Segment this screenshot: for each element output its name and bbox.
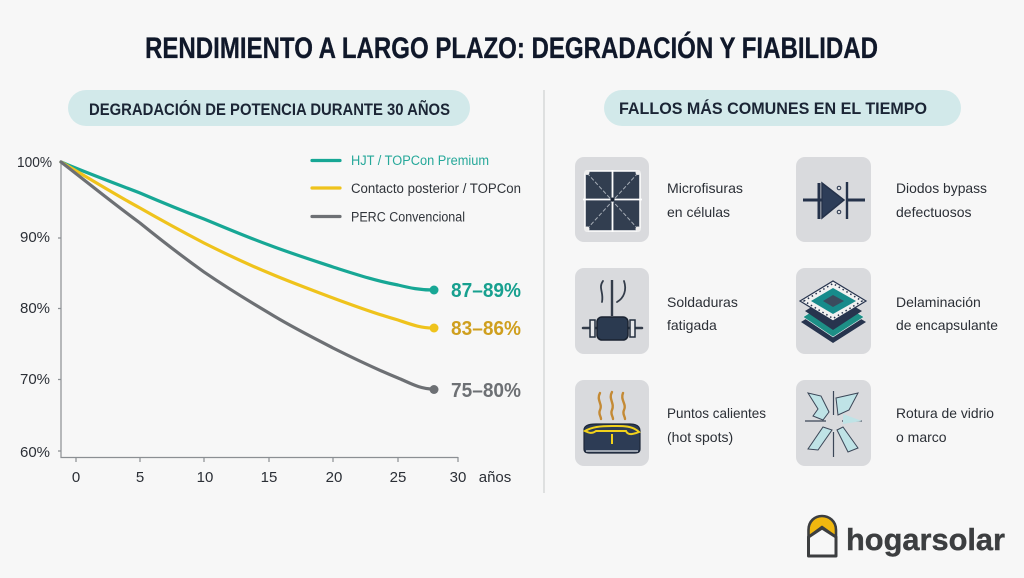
failure: delaminación bbox=[796, 268, 998, 354]
x axis labels: 20 bbox=[326, 469, 342, 486]
icon: delaminated layers bbox=[796, 268, 871, 354]
x axis labels: 5 bbox=[136, 469, 144, 486]
label: Delaminación bbox=[896, 294, 981, 310]
right section heading bbox=[604, 90, 961, 126]
icon: hot spot bbox=[575, 380, 649, 466]
label: Puntos calientes bbox=[667, 405, 766, 421]
icon: fatigued solder joint bbox=[575, 268, 649, 354]
x axis labels: 10 bbox=[197, 469, 213, 486]
y axis labels: 100% bbox=[17, 154, 52, 171]
failure: rotura de vidrio bbox=[796, 380, 994, 466]
x axis labels: 30 bbox=[450, 469, 466, 486]
chart legend: PERC Convencional bbox=[351, 210, 465, 224]
end value: 83–86%: 83–86% bbox=[451, 318, 521, 340]
y axis labels: 70% bbox=[20, 371, 50, 388]
label: fatigada bbox=[667, 317, 717, 333]
left section heading: DEGRADACIÓN DE POTENCIA DURANTE 30 AÑOS bbox=[89, 99, 450, 119]
y axis labels bbox=[17, 154, 52, 461]
label: Rotura de vidrio bbox=[896, 405, 994, 421]
failure: diodos bypass bbox=[796, 157, 987, 242]
icon: cracked solar cell bbox=[575, 157, 649, 242]
curve: PERC Convencional bbox=[61, 162, 438, 394]
y axis labels: 90% bbox=[20, 229, 50, 246]
logo: hogarsolar bbox=[808, 516, 1005, 557]
chart legend bbox=[312, 153, 521, 224]
end value: 75–80%: 75–80% bbox=[451, 380, 521, 402]
x axis labels: años bbox=[479, 469, 511, 486]
label: o marco bbox=[896, 429, 947, 445]
chart legend: HJT / TOPCon Premium bbox=[351, 153, 489, 168]
icon: bypass diode bbox=[796, 157, 871, 242]
failure: microfisuras bbox=[575, 157, 743, 242]
x axis labels: 25 bbox=[390, 469, 406, 486]
failure: puntos calientes bbox=[575, 380, 766, 466]
icon: broken glass bbox=[796, 380, 871, 466]
label: de encapsulante bbox=[896, 317, 998, 333]
y axis labels: 60% bbox=[20, 444, 50, 461]
failure: soldaduras bbox=[575, 268, 738, 354]
label: defectuosos bbox=[896, 204, 972, 220]
label: en células bbox=[667, 204, 730, 220]
label: Diodos bypass bbox=[896, 180, 987, 196]
label: Soldaduras bbox=[667, 294, 738, 310]
right section heading: FALLOS MÁS COMUNES EN EL TIEMPO bbox=[619, 99, 927, 118]
chart axes bbox=[58, 162, 458, 462]
label: Microfisuras bbox=[667, 180, 743, 196]
label: (hot spots) bbox=[667, 429, 733, 445]
icon: house with sun bbox=[808, 516, 836, 556]
x axis labels: 15 bbox=[261, 469, 277, 486]
chart legend: Contacto posterior / TOPCon bbox=[351, 181, 521, 196]
line chart: power degradation bbox=[17, 154, 521, 486]
y axis labels: 80% bbox=[20, 300, 50, 317]
x axis labels: 0 bbox=[72, 469, 80, 486]
wordmark: hogarsolar bbox=[846, 522, 1005, 557]
curve: Contacto posterior / TOPCon bbox=[61, 162, 438, 332]
left section heading bbox=[68, 90, 470, 126]
curve: HJT / TOPCon Premium bbox=[61, 162, 438, 294]
x axis labels bbox=[72, 469, 511, 486]
end value: 87–89%: 87–89% bbox=[451, 280, 521, 302]
